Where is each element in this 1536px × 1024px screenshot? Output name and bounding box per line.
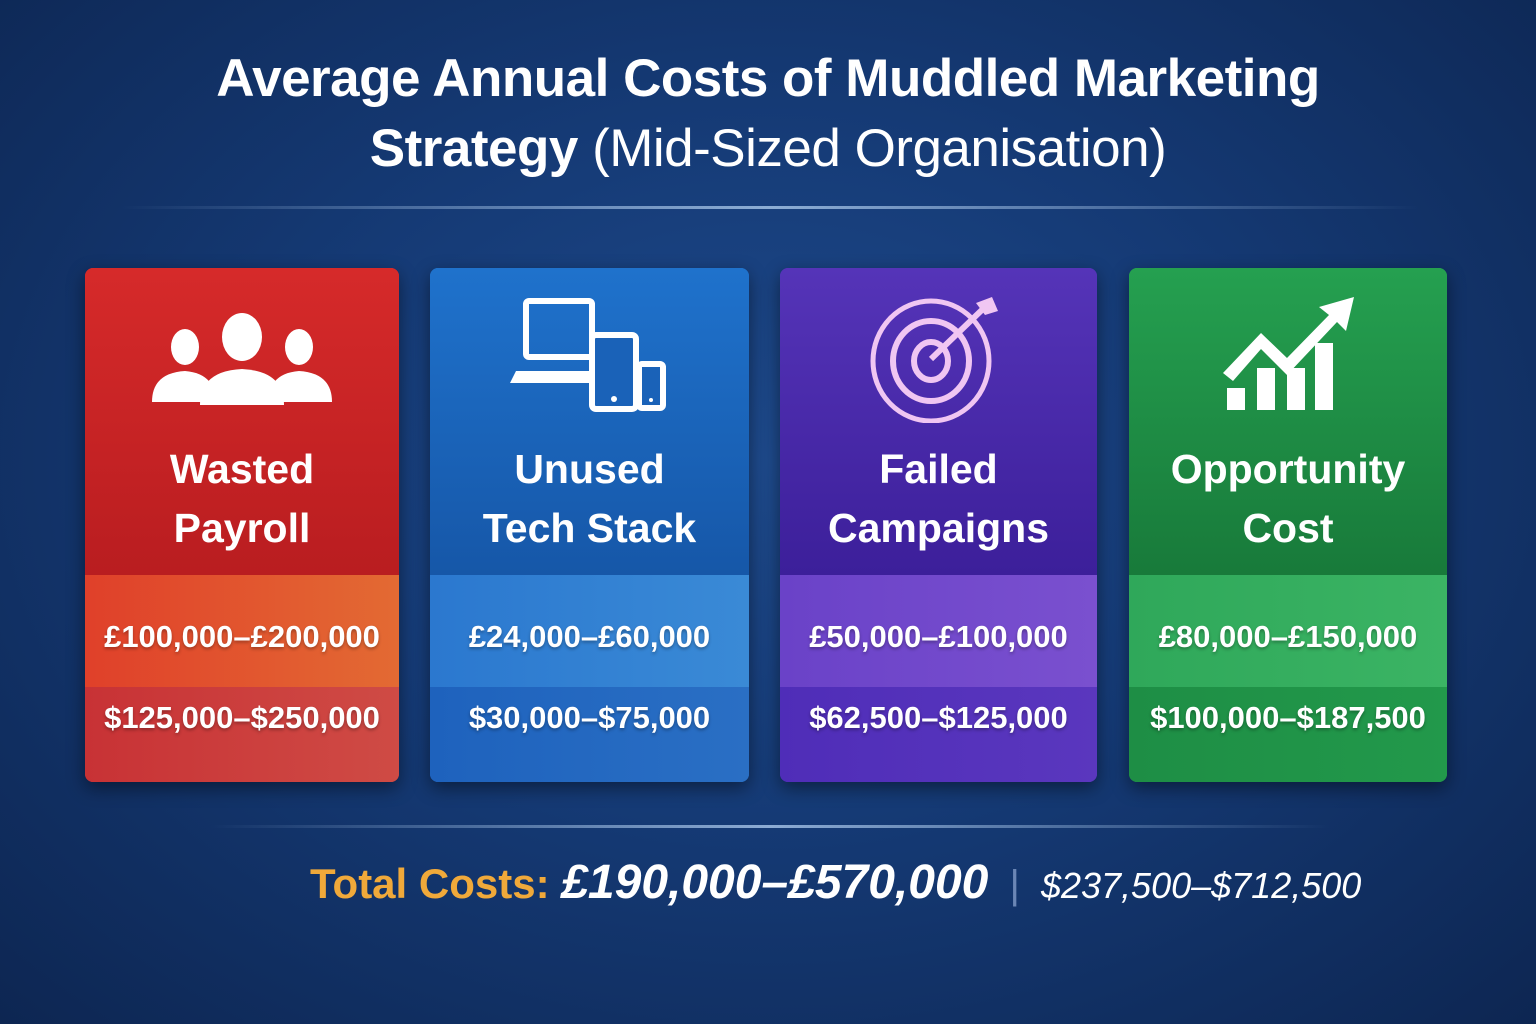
icon: devices — [510, 298, 666, 412]
icon: people — [152, 313, 332, 405]
panel: failed campaigns — [780, 268, 1097, 782]
label — [828, 446, 1049, 551]
label: Campaigns — [828, 505, 1049, 551]
icon: growth chart — [1223, 297, 1354, 410]
value usd: $100,000–$187,500 — [1150, 700, 1426, 735]
value gbp: £50,000–£100,000 — [809, 619, 1068, 654]
value gbp: £24,000–£60,000 — [469, 619, 710, 654]
value usd — [85, 687, 399, 782]
value usd: $125,000–$250,000 — [104, 700, 380, 735]
title: Strategy (Mid-Sized Organisation) — [370, 119, 1166, 178]
total costs: Total Costs: £190,000–£570,000 | $237,500–$712,500 — [310, 856, 1361, 909]
value gbp — [85, 575, 399, 687]
value gbp — [1129, 575, 1447, 687]
label: Cost — [1242, 505, 1334, 551]
label: Failed — [879, 446, 998, 492]
value usd: $30,000–$75,000 — [469, 700, 710, 735]
label — [1171, 446, 1406, 551]
value gbp: £80,000–£150,000 — [1159, 619, 1417, 654]
panel: wasted payroll — [85, 268, 399, 782]
value gbp — [780, 575, 1097, 687]
label: Unused — [514, 446, 665, 492]
panel: unused tech stack — [430, 268, 749, 782]
panel: opportunity cost — [1129, 268, 1447, 782]
value usd — [780, 687, 1097, 782]
label — [483, 446, 696, 551]
label: Wasted — [170, 446, 314, 492]
icon: target — [870, 297, 998, 423]
value usd: $62,500–$125,000 — [809, 700, 1068, 735]
title: Average Annual Costs of Muddled Marketing — [216, 49, 1320, 108]
label: Opportunity — [1171, 446, 1405, 492]
label — [170, 446, 314, 551]
title — [216, 49, 1320, 178]
value usd — [430, 687, 749, 782]
label: Tech Stack — [483, 505, 696, 551]
value gbp — [430, 575, 749, 687]
value gbp: £100,000–£200,000 — [104, 619, 380, 654]
label: Payroll — [174, 505, 310, 551]
value usd — [1129, 687, 1447, 782]
